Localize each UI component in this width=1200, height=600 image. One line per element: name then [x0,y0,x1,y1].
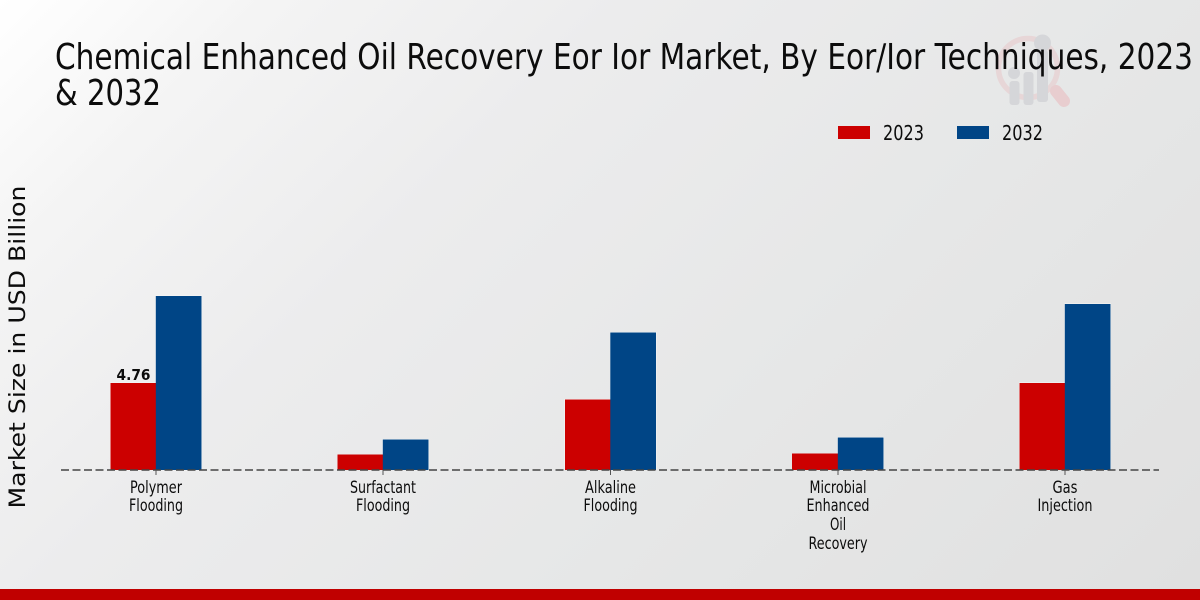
bar chart [61,296,1159,553]
category label: Gas Injection: Gas [1052,478,1078,497]
category label: Alkaline Flooding [584,478,638,515]
category label: Polymer Flooding: Flooding [129,496,183,515]
category label: Microbial Enhanced Oil Recovery: Enhanced [806,496,870,515]
category label: Surfactant Flooding [350,478,416,515]
category label: Alkaline Flooding: Flooding [584,496,638,515]
legend: 2023 [883,121,924,145]
category label: Microbial Enhanced Oil Recovery: Recovery [808,534,868,553]
data label: 4.76 [116,366,150,384]
legend: 2032 [1002,121,1043,145]
category label: Gas Injection [1038,478,1092,515]
footer bar [0,589,1200,600]
category label: Gas Injection: Injection [1038,496,1092,515]
watermark logo: magnifier with bars [998,34,1064,105]
category label: Microbial Enhanced Oil Recovery [806,478,870,553]
bars: Alkaline Flooding [564,332,656,470]
legend [838,121,1043,145]
category label: Alkaline Flooding: Alkaline [585,478,636,497]
category label: Polymer Flooding: Polymer [130,478,182,497]
category label: Microbial Enhanced Oil Recovery: Microbial [810,478,866,497]
title: & 2032 [55,73,161,114]
baseline axis [61,469,1159,471]
bars: Polymer Flooding [110,296,202,470]
category label: Surfactant Flooding: Surfactant [350,478,416,497]
bars: Gas Injection [1019,304,1111,470]
bars: Microbial Enhanced Oil Recovery [792,437,884,470]
y-axis label: Market Size in USD Billion [5,186,31,508]
category label: Microbial Enhanced Oil Recovery: Oil [830,515,846,534]
title [55,37,1193,114]
category label: Polymer Flooding [129,478,183,515]
bars: Surfactant Flooding [338,439,429,470]
category label: Surfactant Flooding: Flooding [356,496,410,515]
